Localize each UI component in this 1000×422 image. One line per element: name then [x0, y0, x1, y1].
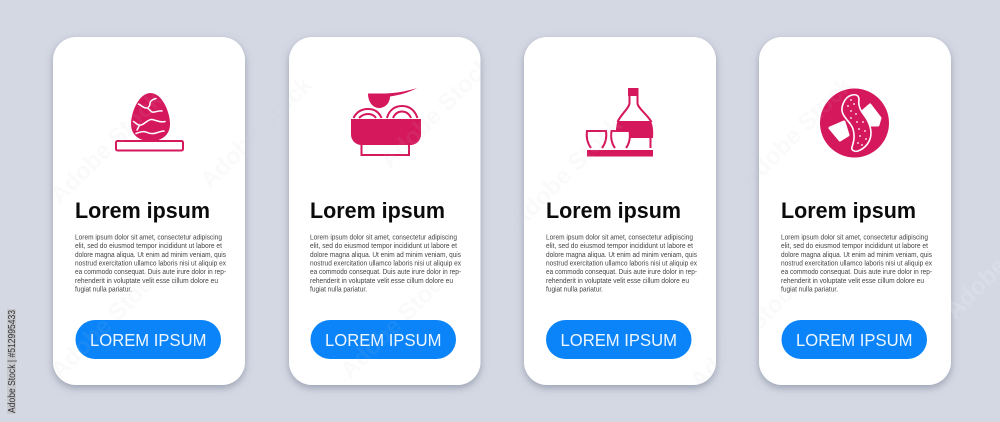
watermark text: Adobe Stock	[375, 51, 498, 174]
watermark text: Adobe Stock	[735, 71, 858, 194]
icon: sake bottle and cups on tray	[587, 88, 653, 156]
body text: elit, sed do eiusmod tempor incididunt ut labore et	[75, 241, 223, 250]
heading: Lorem ipsum	[75, 198, 210, 223]
heading: Lorem ipsum	[310, 198, 445, 223]
watermark text	[45, 51, 1000, 394]
body text: dolore magna aliqua. Ut enim ad minim veniam, quis	[310, 250, 461, 259]
button: LOREM IPSUM	[90, 330, 206, 350]
card 2	[289, 37, 480, 385]
button: LOREM IPSUM	[325, 330, 442, 350]
body text: ea commodo consequat. Duis aute irure dolor in rep-	[546, 267, 697, 276]
watermark text: Adobe Stock	[335, 261, 458, 384]
body text: ea commodo consequat. Duis aute irure dolor in rep-	[75, 267, 226, 276]
body text: Lorem ipsum dolor sit amet, consectetur adipiscing	[546, 232, 693, 242]
body text: elit, sed do eiusmod tempor incididunt ut labore et	[781, 241, 929, 250]
body text	[75, 232, 226, 294]
body text: rehenderit in voluptate velit esse cillum dolore eu	[310, 276, 453, 285]
body text: Lorem ipsum dolor sit amet, consectetur adipiscing	[310, 232, 457, 242]
body text: nostrud exercitation ullamco laboris nisi ut aliquip ex	[546, 258, 697, 268]
body text: rehenderit in voluptate velit esse cillum dolore eu	[75, 276, 218, 285]
body text: ea commodo consequat. Duis aute irure dolor in rep-	[781, 267, 932, 276]
body text: rehenderit in voluptate velit esse cillum dolore eu	[546, 276, 689, 285]
button: LOREM IPSUM	[796, 330, 912, 350]
body text	[781, 232, 932, 294]
icon: easter egg on stand	[116, 93, 183, 150]
button	[546, 320, 692, 359]
body text: Lorem ipsum dolor sit amet, consectetur adipiscing	[75, 232, 222, 242]
card 1	[53, 37, 245, 385]
body text: dolore magna aliqua. Ut enim ad minim veniam, quis	[781, 250, 932, 259]
body text: nostrud exercitation ullamco laboris nisi ut aliquip ex	[781, 258, 932, 268]
button: LOREM IPSUM	[560, 330, 677, 350]
button	[310, 320, 456, 359]
button	[76, 320, 221, 359]
body text: fugiat nulla pariatur.	[75, 285, 132, 294]
watermark text: Adobe Stock	[195, 71, 318, 194]
heading: Lorem ipsum	[546, 198, 681, 223]
watermark text: Adobe Stock	[685, 271, 808, 394]
body text: elit, sed do eiusmod tempor incididunt ut labore et	[310, 241, 458, 250]
body text: dolore magna aliqua. Ut enim ad minim veniam, quis	[546, 250, 697, 259]
card 3	[524, 37, 716, 385]
watermark text: Adobe Stock	[45, 86, 168, 209]
heading: Lorem ipsum	[781, 198, 916, 223]
icon: sausage and bow in circle	[820, 88, 889, 158]
body text: fugiat nulla pariatur.	[310, 285, 367, 294]
body text: fugiat nulla pariatur.	[781, 285, 838, 294]
body text: rehenderit in voluptate velit esse cillum dolore eu	[781, 276, 924, 285]
body text: nostrud exercitation ullamco laboris nisi ut aliquip ex	[75, 258, 226, 268]
body text	[310, 232, 461, 294]
body text: elit, sed do eiusmod tempor incididunt ut labore et	[546, 241, 694, 250]
icon: noodle bowl with spoon	[351, 88, 421, 155]
watermark text: Adobe Stock	[45, 261, 168, 384]
body text: dolore magna aliqua. Ut enim ad minim veniam, quis	[75, 250, 226, 259]
body text: nostrud exercitation ullamco laboris nisi ut aliquip ex	[310, 258, 461, 268]
body text: Lorem ipsum dolor sit amet, consectetur adipiscing	[781, 232, 928, 242]
button	[782, 320, 927, 359]
body text: fugiat nulla pariatur.	[546, 285, 603, 294]
body text: ea commodo consequat. Duis aute irure dolor in rep-	[310, 267, 461, 276]
watermark text: Adobe Stock	[505, 111, 628, 234]
stock credit: Adobe Stock | #512995433	[7, 310, 18, 413]
card 4	[759, 37, 951, 385]
body text	[546, 232, 697, 294]
